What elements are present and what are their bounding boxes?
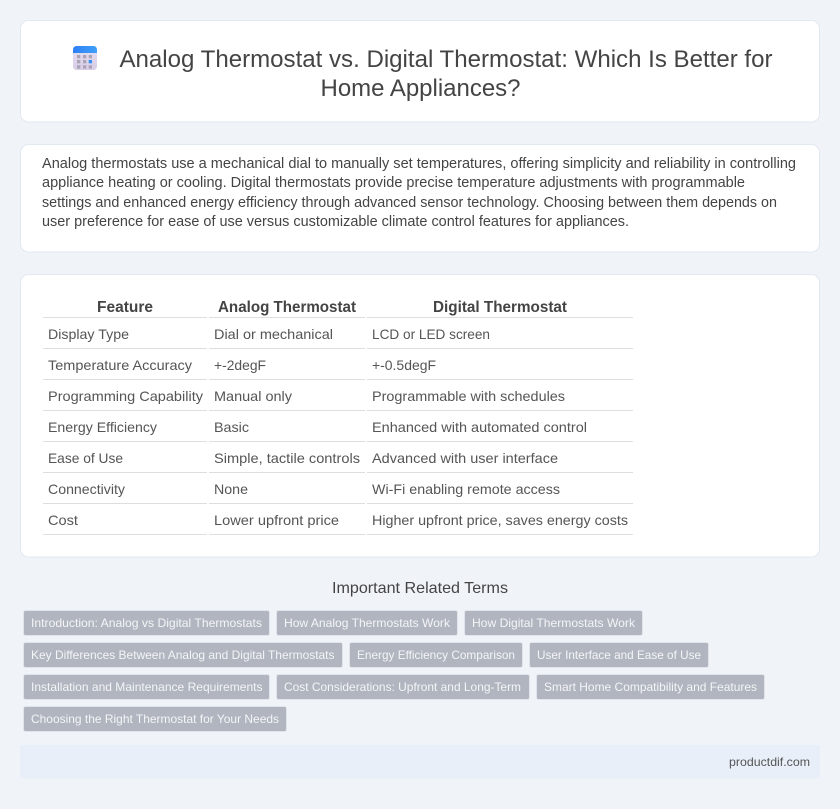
tag [24,706,286,732]
tag [24,610,270,636]
table row: cost: Cost [48,512,78,528]
table header [43,299,633,318]
footer source text: productdif.com [729,755,810,769]
table row: connectivity [43,481,633,504]
tag [464,610,642,636]
title: Analog Thermostat vs. Digital Thermostat: Which Is Better for [120,46,772,73]
tag: Smart Home Compatibility and Features [544,680,757,694]
text block: intro paragraph: user preference for ease of use versus customizable climate control features for appliances. [42,214,629,230]
tag: How Analog Thermostats Work [284,616,451,630]
table row: energy efficiency [43,419,633,442]
title [120,46,772,102]
panel: title card [20,20,820,122]
table row: programming capability: Programming Capability [48,388,203,404]
table header: Digital Thermostat [433,299,568,316]
table row: ease of use [43,450,633,473]
table row: temperature accuracy [43,357,633,380]
panel: intro text [20,144,820,252]
table row: cost: Higher upfront price, saves energy costs [372,512,628,528]
tag list [24,610,764,732]
table row: connectivity: None [214,481,248,497]
table row: energy efficiency: Energy Efficiency [48,419,157,435]
tag [276,610,458,636]
table row: temperature accuracy: Temperature Accuracy [48,357,192,373]
table row: cost [43,512,633,535]
table row: ease of use: Ease of Use [48,450,123,466]
text block: intro paragraph [42,156,796,230]
tag [536,674,764,700]
tag: Introduction: Analog vs Digital Thermostats [31,616,262,630]
tag: Choosing the Right Thermostat for Your Needs [31,712,279,726]
table row: connectivity: Wi-Fi enabling remote access [372,481,560,497]
table header: Analog Thermostat [218,299,357,316]
tag [530,642,708,668]
tag: Installation and Maintenance Requirements [31,680,262,694]
table row: display type: Dial or mechanical [214,326,333,342]
text block: intro paragraph: Analog thermostats use a mechanical dial to manually set temperatures, offering simplicity and reliability in controlling [42,156,796,172]
table row: temperature accuracy: +-0.5degF [372,357,436,373]
tag [24,674,270,700]
text block: intro paragraph: appliance heating or cooling. Digital thermostats provide precise temperature adjustments with programmable [42,175,745,191]
tag [276,674,530,700]
table row: energy efficiency: Enhanced with automated control [372,419,587,435]
table row: programming capability [43,388,633,411]
table row: display type [43,326,633,349]
table row: energy efficiency: Basic [214,419,249,435]
table row: ease of use: Simple, tactile controls [214,450,360,466]
table header: Feature [97,299,153,316]
heading: important related terms: Important Related Terms [332,580,508,597]
tag: User Interface and Ease of Use [537,648,701,662]
text block: intro paragraph: settings and enhanced energy efficiency through advanced sensor technology. Choosing between them depends on [42,195,777,211]
panel: comparison table [20,274,820,557]
tag: Energy Efficiency Comparison [357,648,515,662]
table row: cost: Lower upfront price [214,512,339,528]
title: Home Appliances? [320,75,520,102]
table row: connectivity: Connectivity [48,481,125,497]
footer [20,745,820,778]
tag [350,642,522,668]
table row: display type: LCD or LED screen [372,326,490,342]
icon: calendar [73,46,97,70]
table row: ease of use: Advanced with user interface [372,450,558,466]
tag: Cost Considerations: Upfront and Long-Term [284,680,521,694]
table row: programming capability: Manual only [214,388,292,404]
tag: Key Differences Between Analog and Digital Thermostats [31,648,334,662]
table row: temperature accuracy: +-2degF [214,357,266,373]
tag: How Digital Thermostats Work [472,616,636,630]
table row: programming capability: Programmable with schedules [372,388,565,404]
tag [24,642,342,668]
table row: display type: Display Type [48,326,129,342]
